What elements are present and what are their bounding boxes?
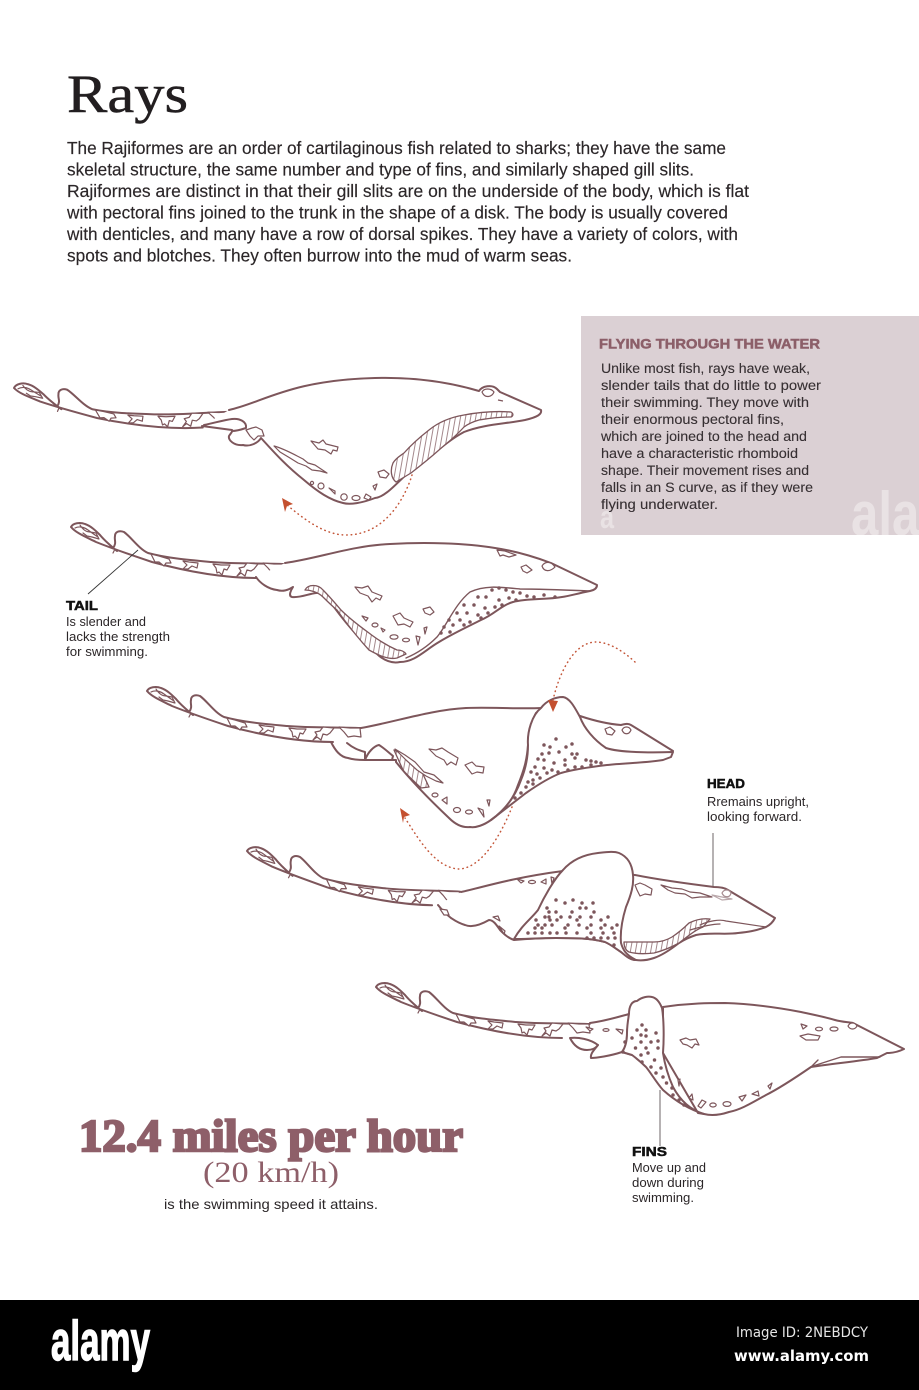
intro text block <box>66 138 749 266</box>
hatched fin underside <box>305 586 406 658</box>
label: tail: for swimming. <box>66 644 148 659</box>
speed callout <box>79 1111 463 1212</box>
tail <box>376 983 590 1038</box>
panel heading: FLYING THROUGH THE WATER <box>599 336 820 352</box>
ray 1: fins down stroke <box>14 371 541 504</box>
pelvic fin <box>331 742 365 760</box>
panel text: shape. Their movement rises and <box>601 463 809 479</box>
label: head: HEAD <box>707 776 745 791</box>
skin spots <box>395 727 631 817</box>
label: fins: Move up and <box>632 1160 706 1175</box>
body outline <box>361 708 542 827</box>
raised pectoral fin <box>514 852 636 960</box>
panel text: have a characteristic rhomboid <box>601 446 798 462</box>
leader: head <box>712 833 714 886</box>
hatched fin underside <box>624 919 710 954</box>
intro text block: Rajiformes are distinct in that their gill slits are on the underside of the body, which is flat <box>67 181 749 201</box>
ray 3: fin rising <box>147 687 673 827</box>
skin spots <box>440 877 732 934</box>
intro text block: with denticles, and many have a row of dorsal spikes. They have a variety of colors, with <box>66 224 738 244</box>
arrow: ray 3 lower fin motion <box>400 807 512 869</box>
title: Rays <box>67 64 188 124</box>
body outline <box>202 378 541 504</box>
denticle dots <box>528 900 617 945</box>
image id: Image ID: 2NEBDCY <box>736 1325 868 1341</box>
panel text: slender tails that do little to power <box>601 378 821 394</box>
denticle dots <box>623 1025 684 1105</box>
body outline <box>438 871 775 960</box>
hatched fin underside <box>394 750 429 788</box>
label: head: looking forward. <box>707 809 802 824</box>
skin spots <box>586 1023 857 1108</box>
eye <box>482 389 503 401</box>
panel text: flying underwater. <box>601 497 718 513</box>
raised pectoral fin and head <box>491 697 673 820</box>
watermark letters in panel: a <box>600 499 614 535</box>
intro text block: with pectoral fins joined to the trunk in the shape of a disk. The body is usually covered <box>66 202 728 222</box>
leader: fins <box>659 1090 661 1146</box>
ray 4: fin high <box>246 847 775 960</box>
hatched fin underside <box>391 412 513 482</box>
label: fins: FINS <box>632 1144 667 1159</box>
panel text: their enormous pectoral fins, <box>601 412 784 428</box>
panel text: their swimming. They move with <box>601 395 809 411</box>
denticle dots <box>441 588 555 633</box>
tail <box>147 687 361 742</box>
intro text block: The Rajiformes are an order of cartilaginous fish related to sharks; they have the same <box>67 138 726 158</box>
label: fins <box>632 1144 706 1205</box>
panel text: falls in an S curve, as if they were <box>601 480 813 496</box>
speed figure: 12.4 miles per hour <box>79 1111 463 1161</box>
label: head: Rremains upright, <box>707 794 809 809</box>
label: tail: TAIL <box>66 598 98 613</box>
panel text: which are joined to the head and <box>600 429 807 445</box>
pelvic fin <box>204 419 246 431</box>
label: fins: swimming. <box>632 1190 694 1205</box>
label: tail: lacks the strength <box>66 629 170 644</box>
skin spots <box>246 427 389 500</box>
ray 2: fins low <box>71 523 597 662</box>
panel text <box>600 361 821 513</box>
label: tail: Is slender and <box>66 614 146 629</box>
jaw <box>811 1057 880 1067</box>
intro text block: spots and blotches. They often burrow into the mud of warm seas. <box>67 246 572 266</box>
website: www.alamy.com <box>734 1347 869 1365</box>
skin spots <box>355 550 555 645</box>
speed caption: is the swimming speed it attains. <box>164 1196 378 1212</box>
metric speed: (20 km/h) <box>203 1156 339 1189</box>
tail <box>71 523 285 578</box>
tail <box>246 847 461 906</box>
jaw line <box>690 920 766 930</box>
footer logo: alamy <box>51 1309 150 1372</box>
fin upper edge <box>406 587 590 658</box>
arrow: ray 1 fin motion <box>282 475 412 535</box>
intro text block: skeletal structure, the same number and type of fins, and similarly shaped gill slits. <box>67 160 694 180</box>
label: fins: down during <box>632 1175 704 1190</box>
leader: tail <box>88 550 138 594</box>
body outline <box>256 543 597 662</box>
panel: flying through the water <box>581 316 919 549</box>
denticle dots <box>515 739 601 798</box>
label: head <box>707 776 809 824</box>
panel text: Unlike most fish, rays have weak, <box>601 361 810 377</box>
tail <box>14 371 231 439</box>
body outline <box>590 1014 632 1058</box>
arrow: ray 3 head fin motion <box>548 642 635 712</box>
ray 5: fin recovering <box>376 983 904 1115</box>
label: tail <box>66 598 170 659</box>
watermark letters in panel <box>600 490 919 535</box>
raised pectoral fin <box>622 997 704 1114</box>
footer bar <box>0 1300 919 1390</box>
